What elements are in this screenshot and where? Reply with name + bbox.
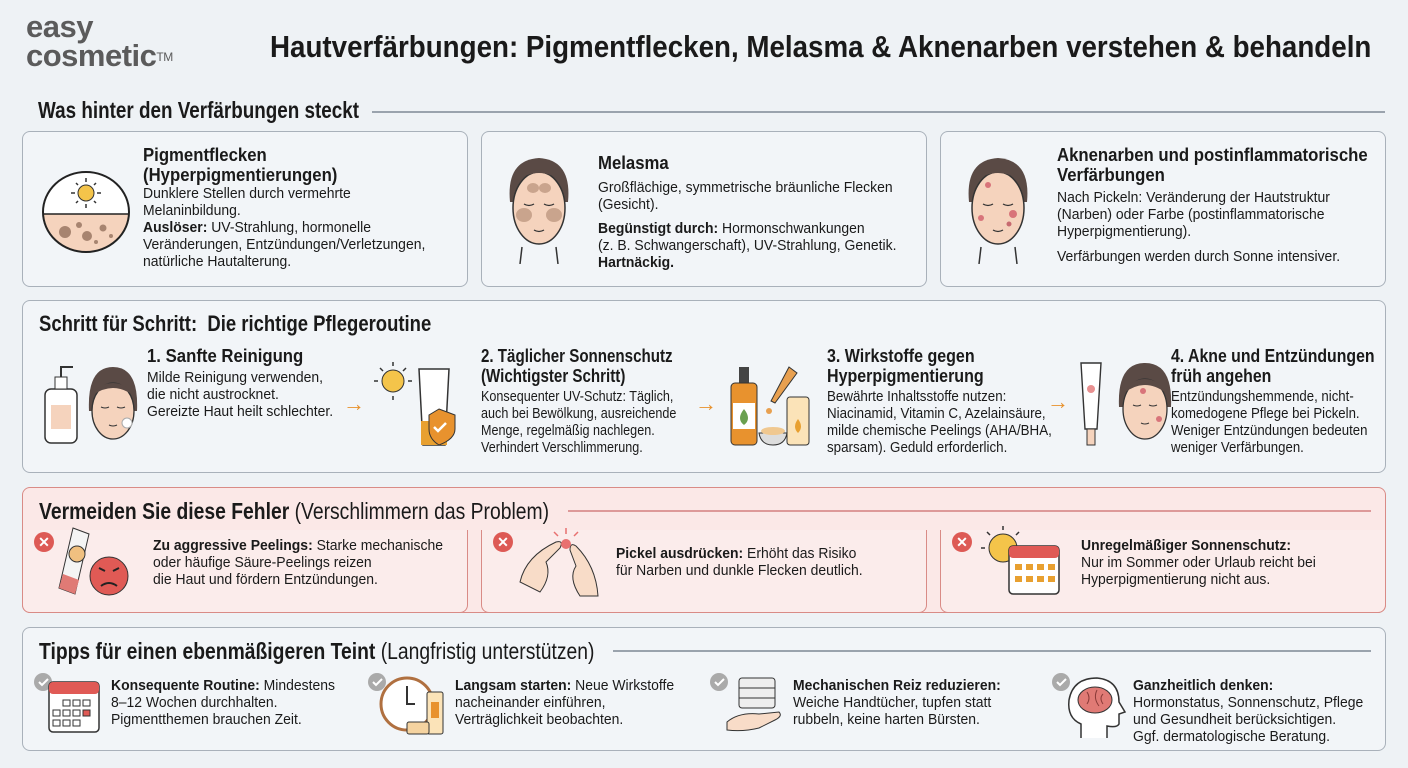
step 1 text: die nicht austrocknet. [147,386,279,403]
text: Nach Pickeln: Veränderung der Hautstruktur [1057,189,1330,206]
step 4 text: 4. Akne und Entzündungen [1171,346,1375,366]
step 1 text: Gereizte Haut heilt schlechter. [147,403,333,420]
text: oder häufige Säure-Peelings reizen [153,554,372,571]
step 1 text: 1. Sanfte Reinigung [147,346,303,366]
icon: x: ✕ [38,534,50,550]
step 2 text: Verhindert Verschlimmerung. [481,439,643,456]
text: Melaninbildung. [143,202,241,219]
icon: check + towel hand [710,673,781,732]
icon: face acne [968,158,1028,264]
panel: mistakes [22,487,1386,613]
text: Hormonstatus, Sonnenschutz, Pflege [1133,694,1363,711]
text: Pigmentflecken [143,145,267,165]
text: die Haut und fördern Entzündungen. [153,571,378,588]
arrow: → [695,391,717,416]
text: natürliche Hautalterung. [143,253,291,270]
section heading: mistakes: Vermeiden Sie diese Fehler (Verschlimmern das Problem) [39,498,549,524]
logo: cosmeticTM [26,38,173,73]
step 3 icon: serums [730,366,810,446]
text: Ganzheitlich denken: [1133,677,1273,694]
text: Hyperpigmentierung nicht aus. [1081,571,1270,588]
text: Verträglichkeit beobachten. [455,711,623,728]
text [455,677,674,728]
text: Hartnäckig. [598,254,674,271]
text: (Narben) oder Farbe (postinflammatorische [1057,206,1324,223]
text: (Gesicht). Begünstigt durch: Hormonschwankungen [598,196,865,237]
text: Großflächige, symmetrische bräunliche Flecken [598,179,893,196]
step 3 text: sparsam). Geduld erforderlich. [827,439,1007,456]
logo [26,9,173,73]
icon: x [34,532,54,552]
step 4 text: weniger Verfärbungen. [1171,439,1304,456]
icon: sun and calendar [981,526,1060,595]
step 2 text [481,346,676,456]
step 2 text: (Wichtigster Schritt) [481,366,625,386]
text [616,545,863,579]
text: Aknenarben und postinflammatorische [1057,145,1368,165]
icon: check + head brain [1052,673,1126,738]
text: Weiche Handtücher, tupfen statt [793,694,991,711]
text: Verfärbungen [1057,165,1165,185]
section heading: routine: Schritt für Schritt: Die richtige Pflegeroutine [39,311,431,336]
logo: easy [26,9,93,44]
icon: x [493,532,513,552]
text: Ggf. dermatologische Beratung. [1133,728,1330,745]
icon: x [952,532,972,552]
text: Konsequente Routine: Mindestens [111,677,335,694]
step 2 text: Konsequenter UV-Schutz: Täglich, [481,388,673,405]
panel: routine [22,300,1386,473]
text: Mechanischen Reiz reduzieren: [793,677,1001,694]
text [143,145,425,270]
step 3 text: Hyperpigmentierung [827,366,984,386]
text: Dunklere Stellen durch vermehrte [143,185,351,202]
panel: Pigmentflecken [22,131,468,287]
icon: face melasma [510,158,568,264]
icon: x: ✕ [956,534,968,550]
step 4 text [1171,346,1375,456]
text: Veränderungen, Entzündungen/Verletzungen, [143,236,425,253]
icon: x: ✕ [497,534,509,550]
step 3 text [827,346,1052,456]
step 1 text [147,346,333,420]
text: Unregelmäßiger Sonnenschutz: [1081,537,1291,554]
text [598,153,897,271]
arrow: → [343,391,365,416]
text: Melasma [598,153,669,173]
step 4 icon: tube and face [1080,362,1172,446]
icon: peeling tube and angry face [58,527,128,596]
step 2 text: auch bei Bewölkung, ausreichende [481,405,676,422]
icon: skin with sun [42,171,130,253]
text: (Hyperpigmentierungen) [143,165,337,185]
icon: hands squeezing [519,528,598,596]
text [1133,677,1363,745]
arrow: → [1047,389,1069,414]
text: Pickel ausdrücken: Erhöht das Risiko [616,545,856,562]
mistake 2 [481,530,927,613]
text: rubbeln, keine harten Bürsten. [793,711,980,728]
text [1057,145,1368,265]
step 2 text: Menge, regelmäßig nachlegen. [481,422,655,439]
mistake 3 [940,530,1386,613]
panel: Aknenarben [940,131,1386,287]
text: Auslöser: UV-Strahlung, hormonelle [143,219,371,236]
icon: check + clock [368,673,444,734]
step 3 text: Bewährte Inhaltsstoffe nutzen: [827,388,1006,405]
text [153,537,443,588]
panel: Melasma [481,131,927,287]
step 4 text: Weniger Entzündungen bedeuten [1171,422,1367,439]
tip 2 [368,673,674,734]
text: nacheinander einführen, [455,694,605,711]
mistake 1 [22,530,468,613]
step 3 text: milde chemische Peelings (AHA/BHA, [827,422,1052,439]
text: Nur im Sommer oder Urlaub reicht bei [1081,554,1316,571]
text: und Gesundheit berücksichtigen. [1133,711,1336,728]
section heading: tips: Tipps für einen ebenmäßigeren Teint (Langfristig unterstützen) [39,638,594,664]
step 4 text: früh angehen [1171,366,1271,386]
icon: check + calendar [34,673,100,733]
text [1081,537,1316,588]
step 2 icon: sunscreen [374,362,456,446]
text: für Narben und dunkle Flecken deutlich. [616,562,863,579]
text [111,677,335,728]
step 1 text: Milde Reinigung verwenden, [147,369,323,386]
text: Langsam starten: Neue Wirkstoffe [455,677,674,694]
text: Pigmentthemen brauchen Zeit. [111,711,302,728]
tip 4 [1052,673,1363,745]
step 3 text: Niacinamid, Vitamin C, Azelainsäure, [827,405,1046,422]
text: Hyperpigmentierung). Verfärbungen werden durch Sonne intensiver. [1057,223,1340,265]
panel: tips [22,627,1386,751]
tip 3 [710,673,1001,732]
text: Zu aggressive Peelings: Starke mechanische [153,537,443,554]
text [793,677,1001,728]
text: (z. B. Schwangerschaft), UV-Strahlung, Genetik. [598,237,897,254]
step 2 text: 2. Täglicher Sonnenschutz [481,346,673,366]
title: Hautverfärbungen: Pigmentflecken, Melasma & Aknenarben verstehen & behandeln [270,29,1371,64]
text: 8–12 Wochen durchhalten. [111,694,277,711]
step 1 icon: cleanser and face [44,366,138,444]
step 4 text: Entzündungshemmende, nicht- [1171,388,1354,405]
step 3 text: 3. Wirkstoffe gegen [827,346,975,366]
step 4 text: komedogene Pflege bei Pickeln. [1171,405,1360,422]
tip 1 [34,673,335,733]
section heading: causes: Was hinter den Verfärbungen steckt [38,97,359,123]
